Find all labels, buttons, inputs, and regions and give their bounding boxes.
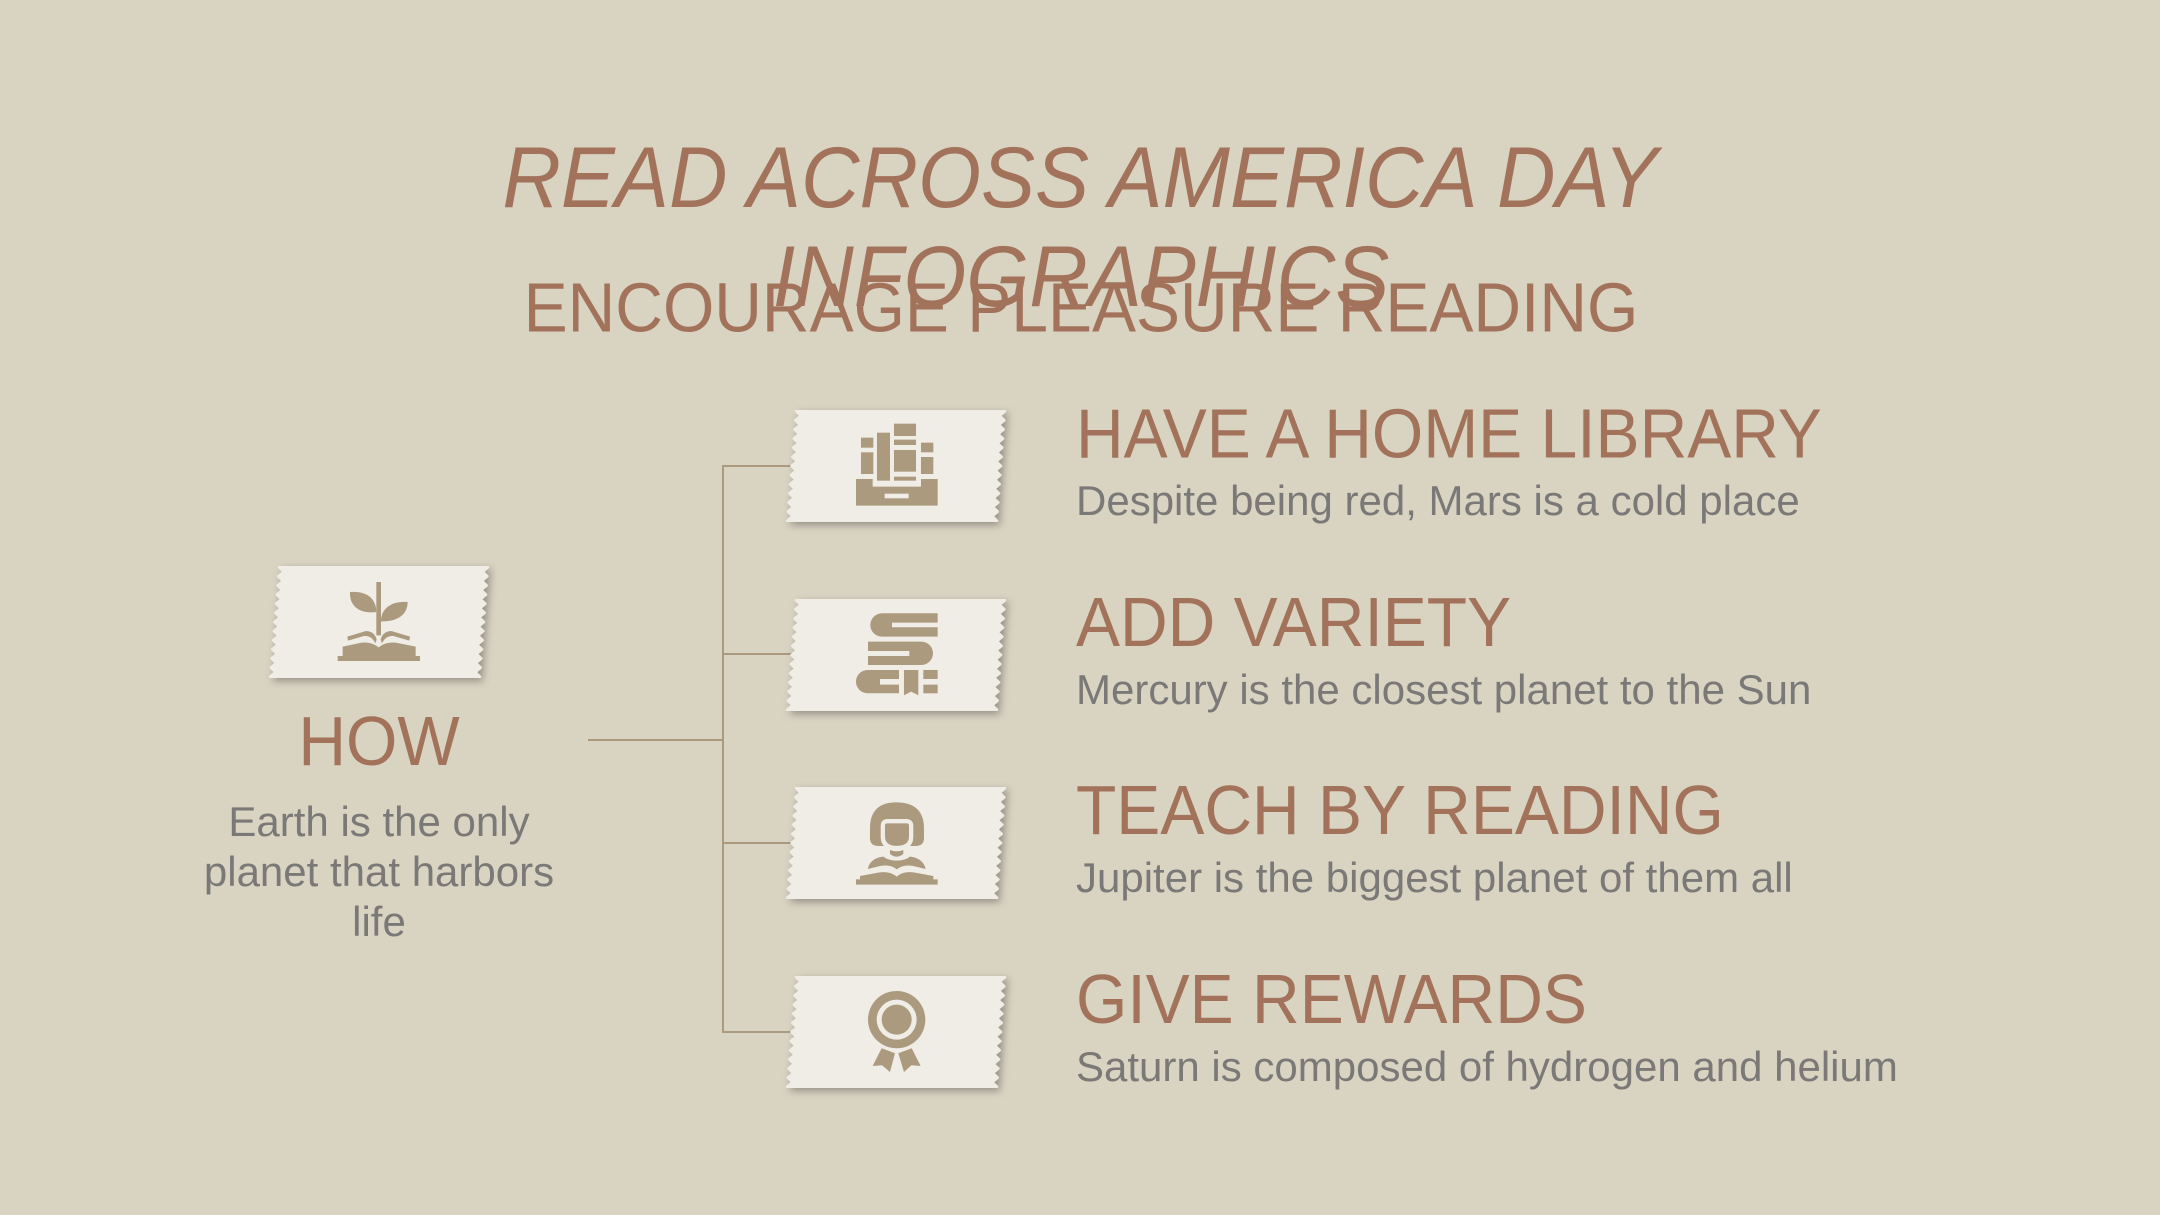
text: how description: planet that harbors bbox=[204, 848, 554, 895]
connector lines bbox=[588, 466, 797, 1032]
panel: teach by reading bbox=[787, 771, 1793, 901]
icon: stacked books bbox=[856, 613, 938, 695]
card: rewards bbox=[787, 977, 1005, 1087]
panel: give rewards bbox=[787, 960, 1898, 1090]
heading: rewards: GIVE REWARDS bbox=[1076, 960, 1587, 1038]
panel: add variety bbox=[787, 583, 1811, 713]
card: library bbox=[787, 411, 1005, 521]
panel: how bbox=[204, 567, 554, 945]
heading: library: HAVE A HOME LIBRARY bbox=[1076, 395, 1822, 473]
icon: person reading bbox=[856, 802, 938, 885]
icon: award rosette bbox=[868, 991, 925, 1072]
text: how description bbox=[204, 798, 554, 945]
card: how bbox=[270, 567, 488, 677]
title bbox=[502, 129, 1663, 325]
text: rewards description: Saturn is composed of hydrogen and helium bbox=[1076, 1043, 1898, 1090]
text: how description: Earth is the only bbox=[228, 798, 530, 845]
text: teach description: Jupiter is the biggest planet of them all bbox=[1076, 854, 1793, 901]
text: variety description: Mercury is the closest planet to the Sun bbox=[1076, 666, 1811, 713]
text: library description: Despite being red, Mars is a cold place bbox=[1076, 477, 1800, 524]
icon: bookshelf bbox=[856, 424, 938, 506]
panel: have a home library bbox=[787, 395, 1822, 524]
card: teach bbox=[787, 788, 1005, 898]
heading: variety: ADD VARIETY bbox=[1076, 583, 1511, 661]
text: how description: life bbox=[352, 898, 406, 945]
heading: teach: TEACH BY READING bbox=[1076, 771, 1724, 849]
title: READ ACROSS AMERICA DAY bbox=[502, 129, 1663, 226]
subtitle: ENCOURAGE PLEASURE READING bbox=[524, 269, 1638, 347]
heading: how: HOW bbox=[298, 702, 460, 780]
icon: plant growing from book bbox=[338, 582, 420, 661]
title: INFOGRAPHICS bbox=[773, 228, 1389, 325]
card: variety bbox=[787, 600, 1005, 710]
